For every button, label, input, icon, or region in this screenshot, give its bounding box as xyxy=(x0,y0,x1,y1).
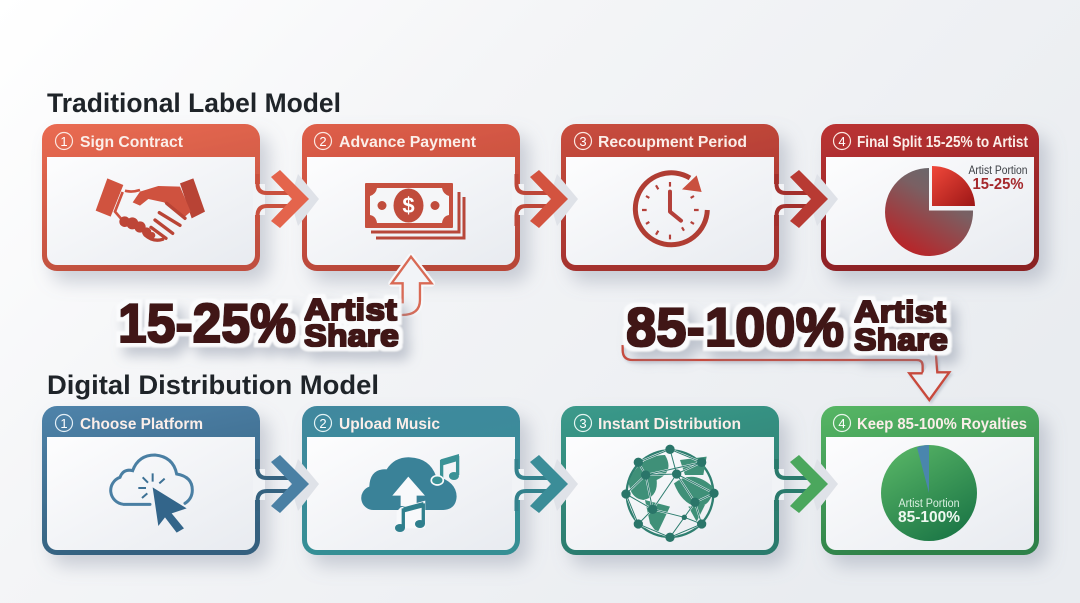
arrow: digital step 2 to step 3 xyxy=(512,455,578,513)
panel: traditional step 2 advance payment: 2 xyxy=(319,134,327,149)
arrow: digital step 1 to step 2 xyxy=(253,455,319,513)
arrow: digital step 3 to step 4 xyxy=(772,455,838,513)
panel: traditional step 2 advance payment: Advance Payment xyxy=(339,134,477,151)
panel: digital step 3 instant distribution: Instant Distribution xyxy=(598,416,741,433)
panel: traditional step 2 advance payment xyxy=(302,124,520,271)
icon: cloud with cursor xyxy=(111,455,192,533)
panel: digital step 1 choose platform: Choose Platform xyxy=(80,416,203,433)
panel: traditional step 3 recoupment period: 3 xyxy=(579,134,587,149)
panel: digital step 3 instant distribution xyxy=(561,406,779,555)
chart: pie 85-100 percent xyxy=(881,445,977,541)
chart: pie 15-25 percent: 15-25% xyxy=(972,176,1024,193)
arrow: step 2 to step 3 xyxy=(512,170,578,228)
chart: pie 85-100 percent: 85-100% xyxy=(898,509,960,526)
heading: digital distribution model: Digital Distribution Model xyxy=(47,370,379,400)
panel: traditional step 3 recoupment period: Recoupment Period xyxy=(598,134,747,151)
heading: traditional label model: Traditional Label Model xyxy=(47,88,341,118)
panel: digital step 1 choose platform xyxy=(42,406,260,555)
chart: pie 15-25 percent: Artist Portion xyxy=(968,165,1028,177)
panel: traditional step 1 sign contract: 1 xyxy=(60,134,68,149)
callout arrow: down to keep royalties xyxy=(623,345,949,400)
callout: 85-100 percent artist share: 85-100% xyxy=(626,296,844,358)
panel: digital step 1 choose platform: 1 xyxy=(60,416,68,431)
icon: stack of banknotes xyxy=(365,183,464,238)
panel: digital step 4 keep royalties xyxy=(821,406,1039,555)
callout: 15-25 percent artist share: Artist xyxy=(304,292,397,327)
panel: digital step 4 keep royalties: Keep 85-100% Royalties xyxy=(857,416,1027,433)
panel: digital step 2 upload music xyxy=(302,406,520,555)
chart: pie 85-100 percent: Artist Portion xyxy=(898,498,960,510)
panel: traditional step 4 final split: Final Split 15-25% to Artist xyxy=(857,134,1029,151)
icon: handshake xyxy=(96,178,205,240)
panel: traditional step 4 final split xyxy=(821,124,1039,271)
arrow: step 3 to step 4 xyxy=(772,170,838,228)
callout: 85-100 percent artist share: Artist xyxy=(854,294,946,329)
panel: digital step 4 keep royalties: 4 xyxy=(838,416,846,431)
callout: 15-25 percent artist share xyxy=(118,292,399,354)
callout: 15-25 percent artist share: Share xyxy=(304,318,399,353)
arrow: step 1 to step 2 xyxy=(253,170,319,228)
callout: 85-100 percent artist share: Share xyxy=(854,322,948,357)
callout: 85-100 percent artist share xyxy=(626,294,948,358)
panel: traditional step 3 recoupment period xyxy=(561,124,779,271)
panel: digital step 2 upload music: Upload Music xyxy=(339,416,440,433)
callout: 15-25 percent artist share: 15-25% xyxy=(118,292,296,354)
icon: cloud upload with music notes xyxy=(361,454,459,532)
chart: pie 15-25 percent xyxy=(885,165,1028,256)
panel: traditional step 1 sign contract xyxy=(42,124,260,271)
panel: digital step 3 instant distribution: 3 xyxy=(579,416,587,431)
icon: clock with arrow xyxy=(635,173,707,245)
icon: network globe xyxy=(621,445,719,542)
icon: stack of banknotes: $ xyxy=(402,193,415,218)
panel: digital step 2 upload music: 2 xyxy=(319,416,327,431)
callout arrow: up to advance payment xyxy=(392,257,432,315)
panel: traditional step 1 sign contract: Sign Contract xyxy=(80,134,184,151)
panel: traditional step 4 final split: 4 xyxy=(838,134,846,149)
